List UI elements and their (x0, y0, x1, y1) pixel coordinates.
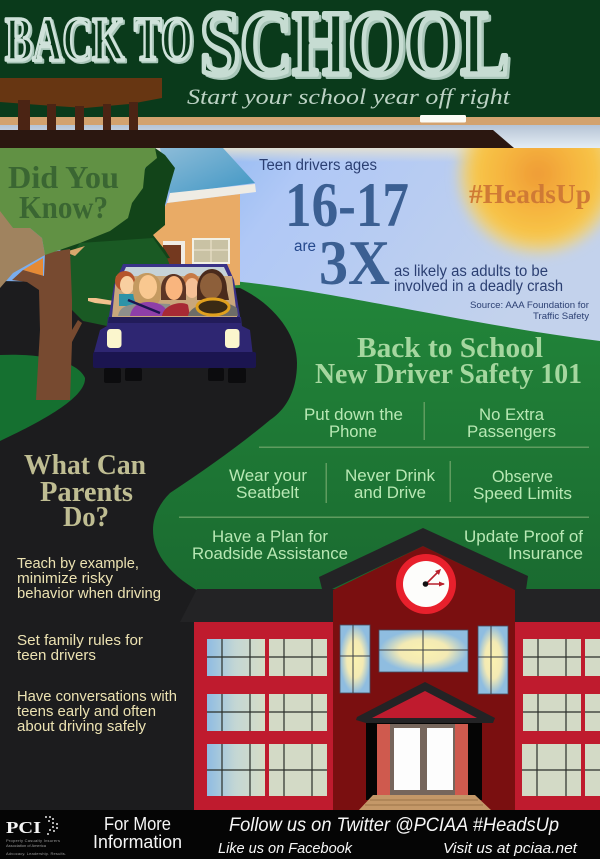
parent advice: about driving safely (17, 718, 146, 735)
heading: Did You Know: Did You (8, 159, 119, 195)
stat block: teen drivers: Teen drivers ages (259, 157, 377, 174)
PCI logo (6, 816, 66, 856)
PCI logo: Advocacy. Leadership. Results. (6, 851, 66, 856)
stat block: teen drivers: involved in a deadly crash (394, 278, 563, 295)
stat block: teen drivers: 16-17 (285, 169, 409, 240)
passenger right rear (182, 273, 200, 298)
wheels (104, 368, 246, 383)
safety tips: Wear your (229, 466, 307, 485)
stat block: teen drivers: are (294, 238, 316, 255)
heading: Did You Know: Know? (19, 189, 108, 225)
safety tips: No Extra (479, 405, 545, 424)
entrance (356, 682, 495, 811)
safety tips: Passengers (467, 422, 556, 441)
stat block: teen drivers: Source: AAA Foundation for (470, 300, 589, 311)
heading: New Driver Safety 101 (315, 333, 582, 390)
safety tips: and Drive (354, 483, 426, 502)
title: Back to School (5, 0, 512, 97)
more information (93, 814, 182, 852)
parent advice: Have conversations with (17, 688, 177, 705)
heading: What Can Parents Do: Do? (63, 502, 109, 533)
safety tips: Speed Limits (473, 484, 572, 503)
more information: Information (93, 832, 182, 852)
blonde passenger (130, 273, 169, 316)
main gable roof (319, 528, 528, 590)
stat block: teen drivers: 3X (319, 227, 390, 298)
parent advice: Teach by example, (17, 555, 139, 572)
stat block: teen drivers: Traffic Safety (533, 311, 589, 322)
subtitle: Start your school year off right (187, 84, 511, 109)
grass hill (0, 281, 600, 811)
heading: New Driver Safety 101: New Driver Safety 101 (315, 359, 582, 390)
kid (115, 271, 135, 306)
seats (118, 303, 172, 316)
wing windows (207, 639, 600, 796)
heading: Did You Know (8, 159, 119, 225)
title: Back to School: BACK TO (7, 8, 195, 76)
safety tips: Phone (329, 422, 377, 441)
safety tips: Update Proof of (464, 527, 583, 546)
scene background: sky (0, 148, 600, 348)
social links: Like us on Facebook (218, 840, 353, 857)
center block (333, 546, 515, 811)
clock (396, 554, 456, 614)
header: chalkboard (0, 0, 600, 148)
safety tips: Insurance (508, 544, 583, 563)
school building (180, 528, 600, 811)
bumper (93, 352, 256, 368)
waving arm (88, 298, 120, 306)
footer bar (0, 810, 600, 859)
driver (188, 269, 238, 316)
parent advice: minimize risky (17, 570, 114, 587)
heading: What Can Parents Do (24, 450, 146, 533)
road (0, 281, 297, 811)
safety tips: Seatbelt (236, 483, 299, 502)
safety tips: Have a Plan for (212, 527, 328, 546)
safety tips (179, 402, 589, 563)
social links: Visit us at pciaa.net (443, 840, 578, 857)
car with passengers (88, 264, 256, 383)
chalk eraser (420, 115, 466, 122)
parent advice (17, 555, 177, 735)
center windows (340, 625, 508, 694)
safety tips: Put down the (304, 405, 403, 424)
stat block: teen drivers (259, 157, 589, 322)
house (150, 148, 256, 290)
hashtag on sun: #HeadsUp (469, 179, 591, 209)
car body (93, 317, 253, 356)
side roofs (180, 589, 335, 622)
PCI logo: PCI (6, 818, 41, 837)
social links (218, 815, 578, 857)
parent advice: Set family rules for (17, 632, 143, 649)
heading: What Can Parents Do: Parents (40, 477, 133, 508)
heading: What Can Parents Do: What Can (24, 450, 146, 481)
headlights (107, 329, 240, 348)
parent advice: teens early and often (17, 703, 156, 720)
heading: New Driver Safety 101: Back to School (357, 333, 543, 364)
parent advice: behavior when driving (17, 585, 161, 602)
safety tips: Roadside Assistance (192, 544, 348, 563)
tree (0, 148, 175, 400)
grass patch: lower left (0, 355, 85, 441)
PCI logo: Association of America (6, 843, 47, 848)
wings (194, 622, 334, 811)
parent advice: teen drivers (17, 647, 96, 664)
safety tips: Observe (492, 467, 553, 486)
social links: Follow us on Twitter @PCIAA #HeadsUp (229, 815, 559, 836)
sun (451, 148, 600, 261)
more information: For More (104, 814, 171, 834)
title: Back to School: BACK TO (5, 6, 193, 74)
PCI logo: Property Casualty Insurers (6, 838, 60, 843)
dark hair passenger (161, 274, 190, 316)
safety tips: Never Drink (345, 466, 435, 485)
stat block: teen drivers: as likely as adults to be (394, 263, 548, 280)
